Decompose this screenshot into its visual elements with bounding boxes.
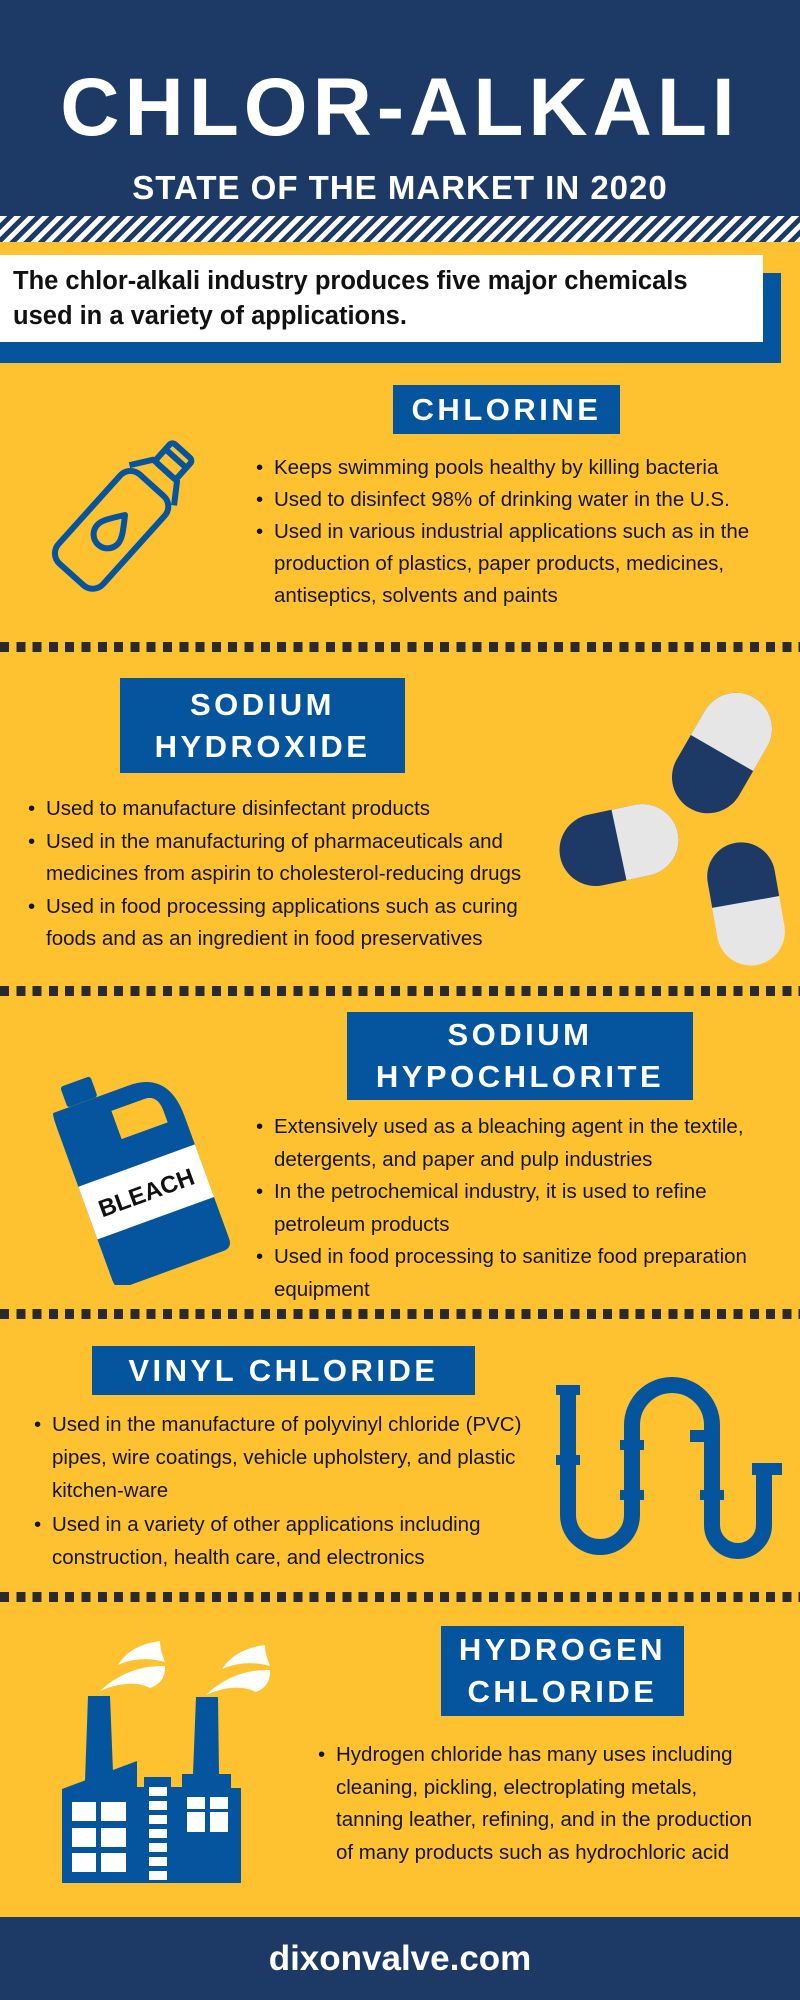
intro box: The chlor-alkali industry produces five major chemicals <box>13 267 688 295</box>
bullets: hydrogen chloride: of many products such as hydrochloric acid <box>336 1841 729 1864</box>
heading: chlorine: CHLORINE <box>412 392 601 426</box>
bullets: hydrogen chloride <box>318 1743 752 1864</box>
heading: vinyl chloride: VINYL CHLORIDE <box>128 1352 439 1388</box>
bullets: sodium hydroxide: foods and as an ingredient in food preservatives <box>46 927 482 950</box>
bullets: chlorine: production of plastics, paper products, medicines, <box>274 552 724 575</box>
bullets: sodium hydroxide: medicines from aspirin to cholesterol-reducing drugs <box>46 862 521 885</box>
bullets: chlorine <box>256 456 749 607</box>
bullets: vinyl chloride: Used in a variety of other applications including <box>52 1513 480 1536</box>
heading: sodium hydroxide: SODIUM <box>190 686 335 722</box>
heading: vinyl chloride <box>92 1346 475 1395</box>
icon: bleach jug <box>53 1076 230 1285</box>
subtitle: STATE OF THE MARKET IN 2020 <box>132 169 668 206</box>
icon: bottle <box>52 440 194 592</box>
bullets: sodium hypochlorite: detergents, and paper and pulp industries <box>274 1148 652 1171</box>
bullets: vinyl chloride: kitchen-ware <box>52 1479 168 1502</box>
heading: sodium hypochlorite: SODIUM <box>448 1017 592 1052</box>
bullets: chlorine: Used in various industrial applications such as in the <box>274 520 749 543</box>
bullets: vinyl chloride: construction, health care, and electronics <box>52 1546 425 1569</box>
bullets: chlorine: Used to disinfect 98% of drinking water in the U.S. <box>274 488 730 511</box>
stripe band <box>0 216 800 242</box>
bullets: sodium hydroxide <box>28 797 521 950</box>
heading: sodium hypochlorite: HYPOCHLORITE <box>376 1059 664 1094</box>
bullets: sodium hydroxide: Used in the manufacturing of pharmaceuticals and <box>46 830 503 852</box>
bullets: hydrogen chloride: tanning leather, refining, and in the production <box>336 1808 752 1831</box>
bullets: sodium hypochlorite: petroleum products <box>274 1213 449 1236</box>
bullets: chlorine: Keeps swimming pools healthy by killing bacteria <box>274 456 718 479</box>
icon: pills <box>560 692 785 966</box>
bullets: sodium hypochlorite: In the petrochemical industry, it is used to refine <box>274 1180 707 1203</box>
header <box>0 0 800 216</box>
bullets: sodium hypochlorite <box>256 1115 747 1301</box>
bullets: sodium hypochlorite: Used in food processing to sanitize food preparation <box>274 1245 747 1268</box>
bullets: sodium hydroxide: Used to manufacture disinfectant products <box>46 797 430 820</box>
bullets: sodium hypochlorite: equipment <box>274 1278 370 1301</box>
bullets: hydrogen chloride: Hydrogen chloride has many uses including <box>336 1743 733 1766</box>
heading: hydrogen chloride: HYDROGEN <box>459 1632 666 1667</box>
heading: sodium hydroxide: HYDROXIDE <box>155 728 370 764</box>
bullets: vinyl chloride <box>34 1413 521 1569</box>
bullets: hydrogen chloride: cleaning, pickling, electroplating metals, <box>336 1776 697 1799</box>
bullets: chlorine: antiseptics, solvents and paints <box>274 584 558 607</box>
icon: factory <box>62 1641 270 1883</box>
bullets: vinyl chloride: Used in the manufacture of polyvinyl chloride (PVC) <box>52 1413 521 1436</box>
intro box: used in a variety of applications. <box>13 302 407 330</box>
heading: sodium hydroxide <box>120 678 405 773</box>
icon: pipes <box>556 1377 782 1559</box>
footer <box>0 1917 800 2000</box>
bullets: sodium hypochlorite: Extensively used as a bleaching agent in the textile, <box>274 1115 744 1138</box>
bullets: sodium hydroxide: Used in food processing applications such as curing <box>46 894 518 918</box>
footer: dixonvalve.com <box>269 1939 531 1978</box>
intro box <box>0 255 763 342</box>
title: CHLOR-ALKALI <box>60 62 740 153</box>
heading: hydrogen chloride <box>441 1626 684 1716</box>
heading: chlorine <box>393 385 620 434</box>
heading: sodium hypochlorite <box>347 1012 693 1100</box>
bullets: vinyl chloride: pipes, wire coatings, vehicle upholstery, and plastic <box>52 1446 515 1469</box>
intro box shadow <box>0 273 781 363</box>
icon: bleach jug: BLEACH <box>95 1164 198 1223</box>
heading: hydrogen chloride: CHLORIDE <box>468 1674 657 1709</box>
